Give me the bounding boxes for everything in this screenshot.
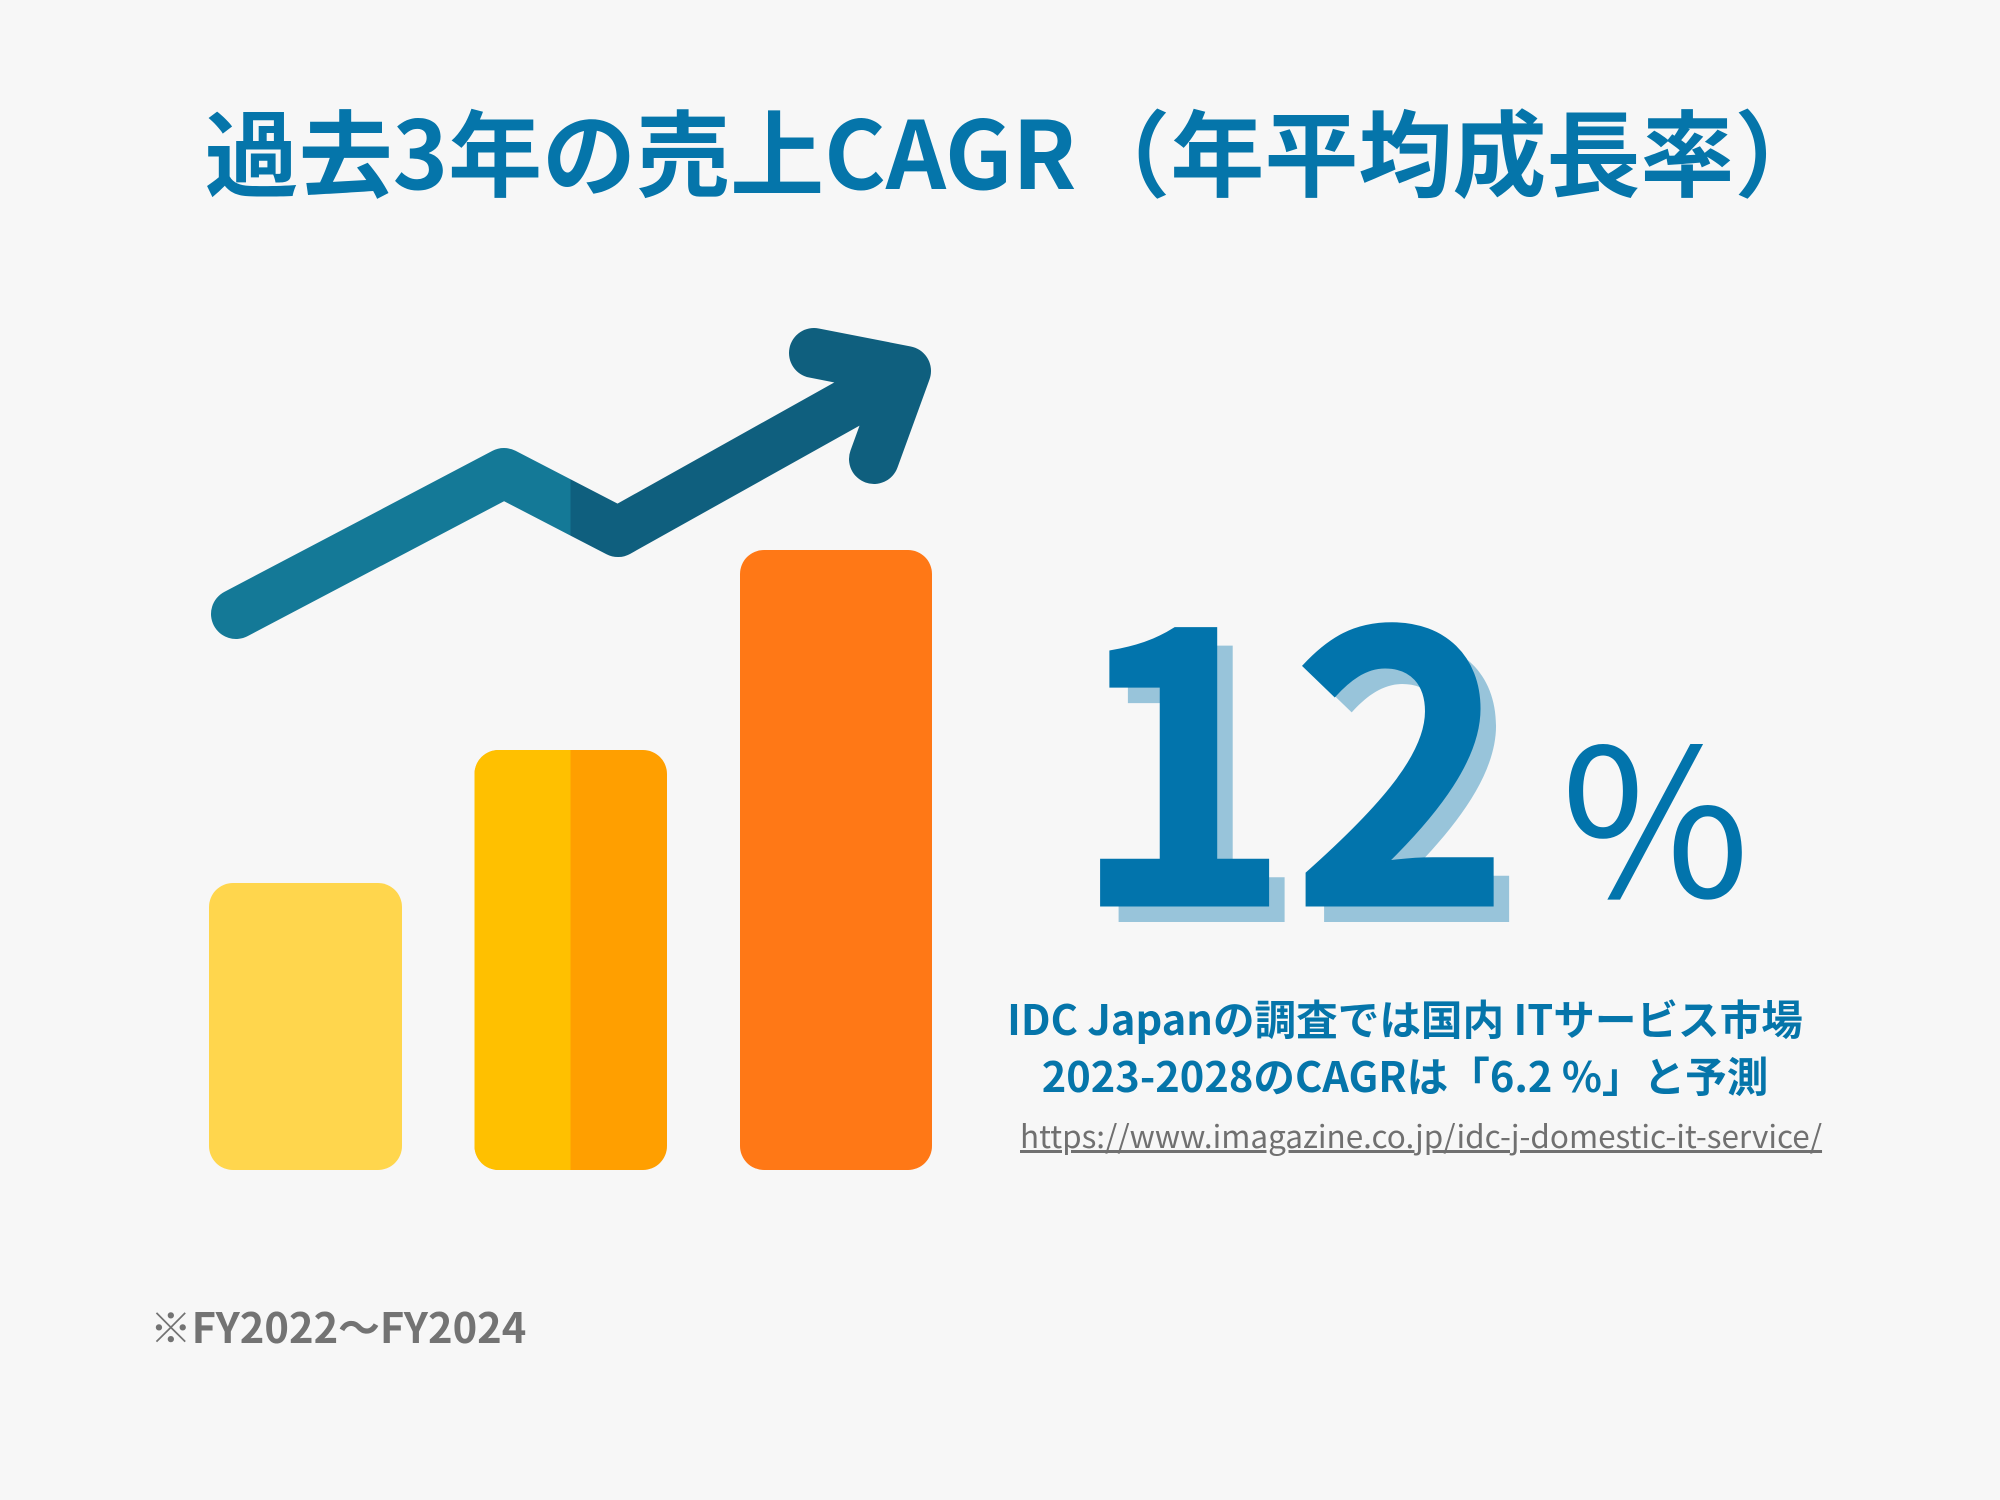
title: 過去3年の売上CAGR（年平均成長率） [205, 81, 1828, 217]
market forecast text: IDC Japanの調査では国内 ITサービス市場 [1007, 987, 1803, 1047]
bar: tall orange [740, 550, 932, 1170]
percent sign: % [1561, 660, 1750, 957]
market forecast text [1007, 987, 1803, 1104]
big number 12: 12 [1071, 473, 1511, 1013]
footnote: ※FY2022〜FY2024 [150, 1296, 526, 1356]
source link: https://www.imagazine.co.jp/idc-j-domestic-it-service/ [1020, 1113, 1822, 1158]
market forecast text: 2023-2028のCAGRは「6.2 %」と予測 [1042, 1044, 1768, 1104]
bar: small yellow [209, 883, 402, 1170]
arrow: trend line [236, 353, 906, 614]
bar: medium two-tone [474, 750, 667, 1170]
chart illustration: rising bars and arrow [209, 328, 932, 1170]
